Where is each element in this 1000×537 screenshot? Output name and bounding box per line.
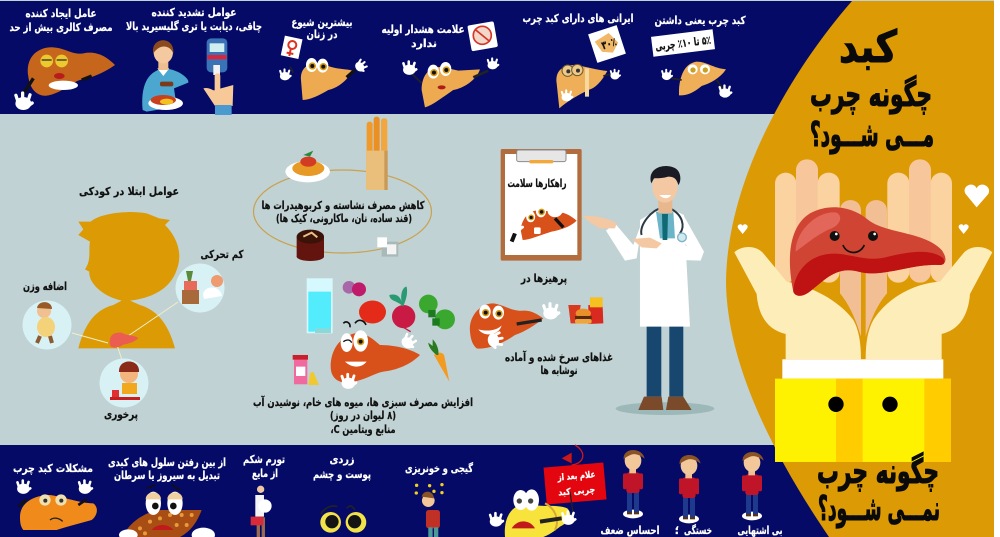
- sign: 5 to 10 percent fat: ۵٪ تا ۱۰٪ چربی: [654, 34, 712, 53]
- label: اضافه وزن: [23, 280, 67, 293]
- illustration: hands holding a liver: [734, 159, 992, 462]
- glucose meter and finger: [203, 38, 233, 115]
- panel: avoid: [470, 272, 613, 377]
- circle: low activity: [176, 264, 224, 312]
- text: (۸ لیوان در روز): [330, 409, 396, 422]
- text: ایرانی های دارای کبد چرب: [522, 12, 634, 25]
- text: منابع ویتامین C،: [330, 423, 396, 436]
- liver with glasses: [556, 64, 621, 108]
- text: زردی: [330, 453, 354, 466]
- top item: cause: [10, 7, 115, 110]
- panel: top navy band: [0, 1, 870, 114]
- text: عوامل تشدید کننده: [152, 6, 236, 19]
- liver tired: [14, 47, 115, 110]
- red sign: علام بعد از: [556, 470, 596, 484]
- apple: [359, 300, 386, 324]
- sugar cubes: [377, 237, 398, 257]
- man with food: [142, 40, 188, 112]
- liver with monocle: [661, 62, 733, 98]
- palm left: [734, 247, 861, 359]
- text: مشکلات کبد چرب: [13, 462, 93, 475]
- bottom item: loss of appetite: [738, 452, 782, 537]
- text: تبدیل به سیروز یا سرطان: [114, 469, 220, 482]
- text: بیشترین شیوع: [292, 16, 352, 29]
- bottom item: weakness: [600, 450, 660, 537]
- red sign: [544, 462, 607, 505]
- board: [501, 149, 582, 261]
- ring: [254, 170, 432, 253]
- fingers right: [866, 159, 952, 337]
- text: کبد چرب یعنی داشتن: [654, 14, 746, 27]
- yellow liver: [489, 489, 577, 537]
- bottom item: symptoms liver with sign: [489, 445, 607, 537]
- shadow: [616, 402, 714, 415]
- circle: overeating: [100, 358, 148, 408]
- legs: [638, 325, 692, 410]
- red sign: چربی کبد: [558, 485, 596, 498]
- liver with forbidden sign: [402, 21, 500, 107]
- text: مصرف کالری بیش از حد: [10, 21, 112, 34]
- smiling liver: [790, 207, 945, 296]
- icon: fast food: [568, 297, 603, 324]
- horn: [562, 445, 583, 515]
- text: غذاهای سرخ شده و آماده: [505, 350, 613, 364]
- head: [651, 166, 680, 213]
- person: [679, 455, 701, 523]
- bottom item: fatigue: [679, 455, 712, 537]
- text: افزایش مصرف سبزی ها، میوه های خام، نوشیدن آب: [253, 395, 473, 409]
- top item: most common in women: [279, 16, 370, 100]
- title: how it becomes fatty, line 1: چگونه چرب: [810, 75, 932, 115]
- bottom item: jaundice: [313, 453, 371, 533]
- connectors: [72, 302, 178, 360]
- cheering liver: [507, 200, 577, 242]
- text: احساس ضعف: [600, 524, 660, 537]
- top item: fatty liver definition: [651, 14, 746, 98]
- panel: reduce starch: [254, 117, 432, 261]
- label: کم تحرکی: [200, 248, 244, 261]
- panel: childhood factors: [22, 185, 244, 421]
- icon: hearts: [738, 185, 989, 234]
- cake: [297, 230, 324, 261]
- happy liver: [331, 320, 420, 389]
- text: عامل ایجاد کننده: [26, 7, 96, 20]
- person: [742, 452, 764, 520]
- small liver: [110, 333, 138, 348]
- top item: no early warning: [382, 21, 500, 107]
- onions: [343, 281, 366, 296]
- text: نوشابه ها: [540, 364, 578, 377]
- coat: [606, 208, 704, 327]
- right white margin: [994, 0, 1000, 537]
- text: از بین رفتن سلول های کبدی: [108, 456, 226, 469]
- panel: increase vegetables: [253, 278, 473, 436]
- palm right: [866, 247, 992, 359]
- child silhouette: [78, 212, 179, 348]
- person: [623, 450, 645, 518]
- text: از مایع: [252, 467, 278, 480]
- text: گیجی و خونریزی: [405, 462, 473, 475]
- bottom item: ascites: [243, 453, 285, 537]
- text: ندارد: [411, 37, 437, 50]
- cirrhotic liver: [119, 485, 215, 537]
- woman with swollen belly: [251, 486, 272, 537]
- text: چاقی، دیابت یا تری گلیسیرید بالا: [126, 20, 262, 33]
- text: در زنان: [306, 28, 338, 41]
- fingers left: [775, 159, 861, 337]
- pasta plate: [285, 151, 330, 182]
- sign: 30 percent: ۳۰٪: [600, 35, 618, 52]
- text: کاهش مصرف نشاسته و کربوهیدرات ها: [262, 199, 425, 212]
- liver refusing: [470, 302, 561, 351]
- text: خستگی: [684, 524, 712, 537]
- title: liver: کبد: [839, 22, 897, 73]
- text: راهکارها سلامت: [508, 177, 566, 190]
- cuff: [782, 359, 943, 379]
- text: تورم شکم: [243, 453, 285, 466]
- text: پوست و چشم: [313, 468, 371, 481]
- liver with female sign: [279, 36, 370, 100]
- top item: aggravating factors: [126, 6, 262, 115]
- bread bag: [366, 117, 388, 190]
- text: علامت هشدار اولیه: [382, 23, 464, 36]
- sleeve: [775, 379, 951, 462]
- bottom item: cell death: [108, 456, 226, 537]
- heading: عوامل ابتلا در کودکی: [79, 185, 179, 198]
- beet: [389, 287, 415, 332]
- panel: bottom navy band: [0, 445, 870, 537]
- vitamin tube: [293, 355, 319, 385]
- yellow eyes: [320, 506, 366, 533]
- carrot: [428, 339, 449, 382]
- label: پرخوری: [104, 408, 138, 421]
- bottom item: fatty liver problems: [13, 462, 97, 530]
- broccoli: [419, 295, 455, 329]
- top item: Iranians with fatty liver: [522, 12, 634, 108]
- text: (قند ساده، نان، ماکارونی، کیک ها): [276, 212, 412, 225]
- bottom item: dizziness and bleeding: [405, 462, 473, 537]
- text: بی اشتهایی: [738, 524, 782, 537]
- doctor: [583, 166, 714, 415]
- panel: gold curved side panel: [726, 1, 994, 537]
- separator: ؛: [675, 524, 679, 537]
- dizzy person: [415, 483, 444, 537]
- clipboard: healthy solutions: [501, 149, 582, 261]
- text: پرهیزها در: [520, 272, 567, 285]
- spotted liver: [16, 479, 97, 530]
- circle: weight gain: [22, 300, 72, 350]
- glass of water: [307, 278, 333, 333]
- hands: [583, 216, 662, 248]
